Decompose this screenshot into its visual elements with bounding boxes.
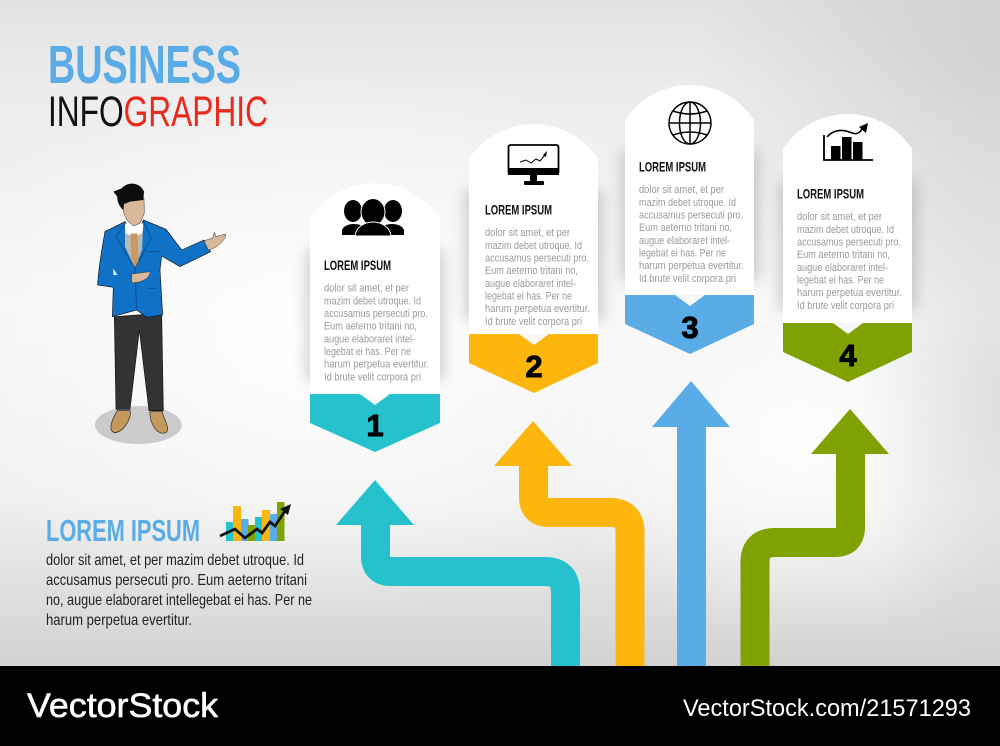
card 3 text: harum perpetua evertitur. — [639, 260, 744, 272]
footer bar: VectorStock — [27, 687, 219, 725]
section heading with chart icon — [46, 502, 291, 548]
description text — [46, 552, 312, 629]
card 1 text: Id brute velit corpora pri — [324, 372, 421, 384]
card 2 number: 2 — [525, 349, 543, 384]
arrow 3: blue — [652, 381, 730, 666]
card 4 heading: LOREM IPSUM — [797, 186, 864, 202]
card 3 text: legebat ei has. Per ne — [639, 248, 726, 260]
icon: people — [342, 198, 404, 236]
card 3 band — [625, 295, 754, 354]
description text: no, augue elaboraret intellegebat ei has. Per ne — [46, 592, 312, 609]
card 4 text: legebat ei has. Per ne — [797, 274, 884, 286]
illustration: presenter — [95, 184, 226, 444]
card 1 text — [324, 282, 429, 384]
card 1 text: legebat ei has. Per ne — [324, 346, 411, 358]
card 3 text: dolor sit amet, et per — [639, 184, 724, 196]
section heading with chart icon: LOREM IPSUM — [46, 513, 200, 548]
arrow 4: green — [755, 409, 889, 666]
card 4 band — [783, 323, 912, 382]
card 4 text: augue elaboraret intel- — [797, 262, 888, 274]
card 1 text: dolor sit amet, et per — [324, 282, 409, 294]
card 1 band — [310, 394, 440, 452]
card 2 text: dolor sit amet, et per — [485, 227, 570, 239]
card 3 text: accusamus persecuti pro. — [639, 210, 743, 222]
title: BUSINESS — [48, 35, 241, 95]
card 2 text: Id brute velit corpora pri — [485, 316, 582, 328]
card 4 text: accusamus persecuti pro. — [797, 236, 901, 248]
card 2 text: harum perpetua evertitur. — [485, 303, 590, 315]
icon: mini bar chart — [220, 502, 291, 541]
arrow 1: teal — [336, 480, 566, 666]
description text: dolor sit amet, et per mazim debet utroque. Id — [46, 552, 304, 569]
card 1 text: Eum aeterno tritani no, — [324, 321, 417, 333]
card 2 text: Eum aeterno tritani no, — [485, 265, 578, 277]
card 2 heading: LOREM IPSUM — [485, 202, 552, 218]
description text: harum perpetua evertitur. — [46, 612, 192, 629]
card 4 text — [797, 211, 902, 312]
icon: monitor with chart — [508, 145, 559, 185]
card 2 text: legebat ei has. Per ne — [485, 290, 572, 302]
card 2 — [465, 124, 603, 393]
arrow 2: yellow — [494, 421, 630, 666]
description text: accusamus persecuti pro. Eum aeterno tritani — [46, 572, 307, 589]
footer bar — [0, 666, 1000, 746]
title — [48, 35, 268, 136]
card 1 heading: LOREM IPSUM — [324, 257, 391, 273]
icon: globe — [669, 102, 711, 144]
card 2 text: accusamus persecuti pro. — [485, 252, 589, 264]
card 3 text: Id brute velit corpora pri — [639, 273, 736, 285]
card 1 text: mazim debet utroque. Id — [324, 295, 421, 307]
card 3 — [621, 85, 759, 354]
card 4 text: harum perpetua evertitur. — [797, 287, 902, 299]
card 3 text: mazim debet utroque. Id — [639, 197, 736, 209]
card 4 text: Id brute velit corpora pri — [797, 300, 894, 312]
card 1 text: accusamus persecuti pro. — [324, 308, 428, 320]
card 3 text: augue elaboraret intel- — [639, 235, 730, 247]
card 3 text: Eum aeterno tritani no, — [639, 222, 732, 234]
icon: growth chart — [824, 123, 873, 160]
footer bar: VectorStock.com/21571293 — [683, 695, 971, 722]
card 2 text — [485, 227, 590, 328]
card 2 text: augue elaboraret intel- — [485, 278, 576, 290]
card 1 text: harum perpetua evertitur. — [324, 359, 429, 371]
card 1 text: augue elaboraret intel- — [324, 333, 415, 345]
card 3 text — [639, 184, 744, 285]
card 2 text: mazim debet utroque. Id — [485, 240, 582, 252]
card 4 text: Eum aeterno tritani no, — [797, 249, 890, 261]
card 4 number: 4 — [839, 338, 857, 373]
card 4 text: mazim debet utroque. Id — [797, 224, 894, 236]
card 3 number: 3 — [681, 310, 699, 345]
card 4 — [779, 114, 917, 382]
title: INFOGRAPHIC — [48, 88, 268, 136]
card 4 text: dolor sit amet, et per — [797, 211, 882, 223]
card 3 heading: LOREM IPSUM — [639, 158, 706, 174]
card 2 band — [469, 334, 598, 393]
card 1 number: 1 — [366, 408, 384, 443]
card 1 — [306, 183, 444, 452]
